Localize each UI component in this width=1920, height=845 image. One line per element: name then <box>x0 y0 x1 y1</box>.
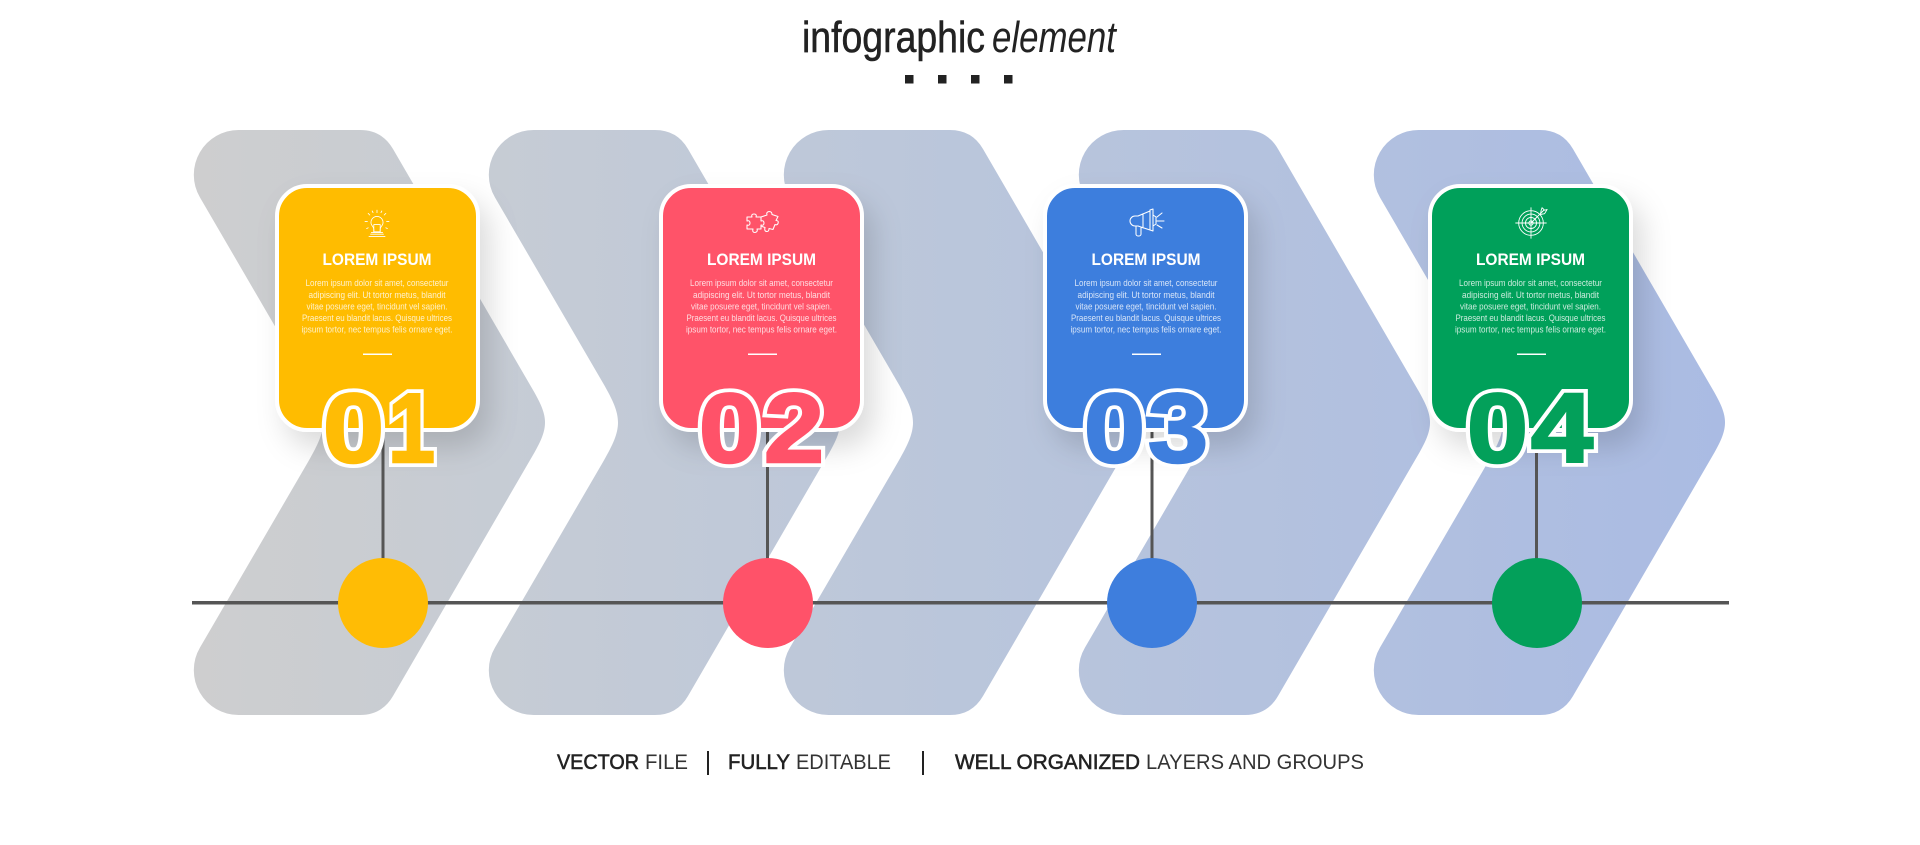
title: infographic <box>802 13 985 62</box>
number 03: 3 <box>1148 373 1208 483</box>
number 02: 0 <box>699 373 760 483</box>
body text: adipiscing elit. Ut tortor metus, blandit <box>1462 289 1599 300</box>
chevron 5 <box>1374 130 1725 715</box>
divider <box>363 354 392 355</box>
heading: LOREM IPSUM <box>1476 250 1585 269</box>
number 02 <box>699 373 824 483</box>
chevron 4 <box>1079 130 1430 715</box>
number 04: 0 <box>1467 373 1528 483</box>
icon: megaphone <box>1130 209 1164 236</box>
heading: LOREM IPSUM <box>707 250 816 269</box>
heading: LOREM IPSUM <box>322 250 432 269</box>
body text: ipsum tortor, nec tempus felis ornare eget. <box>686 324 837 334</box>
connector 4 <box>1535 425 1538 605</box>
number 04: 0 <box>1467 373 1528 483</box>
footer tagline: VECTOR <box>557 751 639 774</box>
body text: ipsum tortor, nec tempus felis ornare eget. <box>302 324 452 334</box>
body text: vitae posuere eget, tincidunt vel sapien. <box>306 300 448 312</box>
node 2 <box>723 558 813 648</box>
number 04 <box>1467 373 1593 483</box>
footer tagline: FULLY <box>728 751 790 774</box>
number 02: 0 <box>699 373 760 483</box>
panel: step 01 <box>277 186 478 430</box>
body text: ipsum tortor, nec tempus felis ornare eget. <box>1455 324 1606 334</box>
body text: adipiscing elit. Ut tortor metus, blandit <box>1078 289 1215 300</box>
icon: puzzle <box>747 212 778 232</box>
number 03: 3 <box>1148 373 1208 483</box>
body text: Lorem ipsum dolor sit amet, consectetur <box>306 277 448 288</box>
body text <box>1455 277 1606 334</box>
icon: light bulb <box>365 210 389 237</box>
body text: Lorem ipsum dolor sit amet, consectetur <box>690 277 833 288</box>
panel: step 04 <box>1430 186 1631 430</box>
number 01: 1 <box>388 373 435 483</box>
number 04: 4 <box>1531 373 1593 483</box>
timeline <box>192 601 1729 604</box>
body text: Praesent eu blandit lacus. Quisque ultrices <box>686 312 837 323</box>
number 02: 2 <box>764 373 824 483</box>
number 03 <box>1084 373 1208 483</box>
footer tagline: WELL ORGANIZED <box>955 751 1140 774</box>
panel: step 03 <box>1045 186 1246 430</box>
footer tagline <box>557 751 1364 775</box>
chevron 3 <box>784 130 1135 715</box>
footer tagline: LAYERS AND GROUPS <box>1146 751 1364 774</box>
panel: step 02 <box>661 186 862 430</box>
body text: adipiscing elit. Ut tortor metus, blandit <box>308 289 446 300</box>
connector 3 <box>1150 425 1154 605</box>
body text: Lorem ipsum dolor sit amet, consectetur <box>1074 277 1218 288</box>
body text: Praesent eu blandit lacus. Quisque ultrices <box>1071 312 1221 323</box>
body text: ipsum tortor, nec tempus felis ornare eget. <box>1070 324 1222 334</box>
title <box>802 13 1117 62</box>
number 01: 0 <box>323 373 384 483</box>
number 01: 1 <box>388 373 435 483</box>
node 1 <box>338 558 428 648</box>
body text: vitae posuere eget, tincidunt vel sapien. <box>1076 300 1216 312</box>
footer tagline: EDITABLE <box>796 751 891 774</box>
body text: vitae posuere eget, tincidunt vel sapien. <box>691 300 832 312</box>
title dots <box>905 75 1012 84</box>
title: element <box>992 13 1117 62</box>
body text: Praesent eu blandit lacus. Quisque ultrices <box>1456 312 1606 323</box>
body text <box>686 277 837 334</box>
number 04: 4 <box>1531 373 1593 483</box>
body text: vitae posuere eget, tincidunt vel sapien. <box>1460 300 1601 312</box>
number 01: 0 <box>323 373 384 483</box>
connector 1 <box>382 425 384 605</box>
chevron 1 <box>194 130 545 715</box>
icon: target <box>1516 208 1547 238</box>
node 3 <box>1107 558 1197 648</box>
chevron 2 <box>489 130 840 715</box>
body text: Lorem ipsum dolor sit amet, consectetur <box>1459 277 1602 288</box>
heading: LOREM IPSUM <box>1092 250 1200 269</box>
divider <box>748 354 777 355</box>
body text <box>302 277 452 334</box>
body text <box>1070 277 1222 334</box>
divider <box>1517 354 1546 355</box>
number 01 <box>323 373 435 483</box>
node 4 <box>1492 558 1582 648</box>
body text: Praesent eu blandit lacus. Quisque ultrices <box>302 312 452 323</box>
number 03: 0 <box>1084 373 1145 483</box>
divider <box>1132 354 1161 355</box>
connector 2 <box>766 425 769 605</box>
number 02: 2 <box>764 373 824 483</box>
footer tagline: FILE <box>645 751 688 774</box>
number 03: 0 <box>1084 373 1145 483</box>
body text: adipiscing elit. Ut tortor metus, blandit <box>693 289 830 300</box>
